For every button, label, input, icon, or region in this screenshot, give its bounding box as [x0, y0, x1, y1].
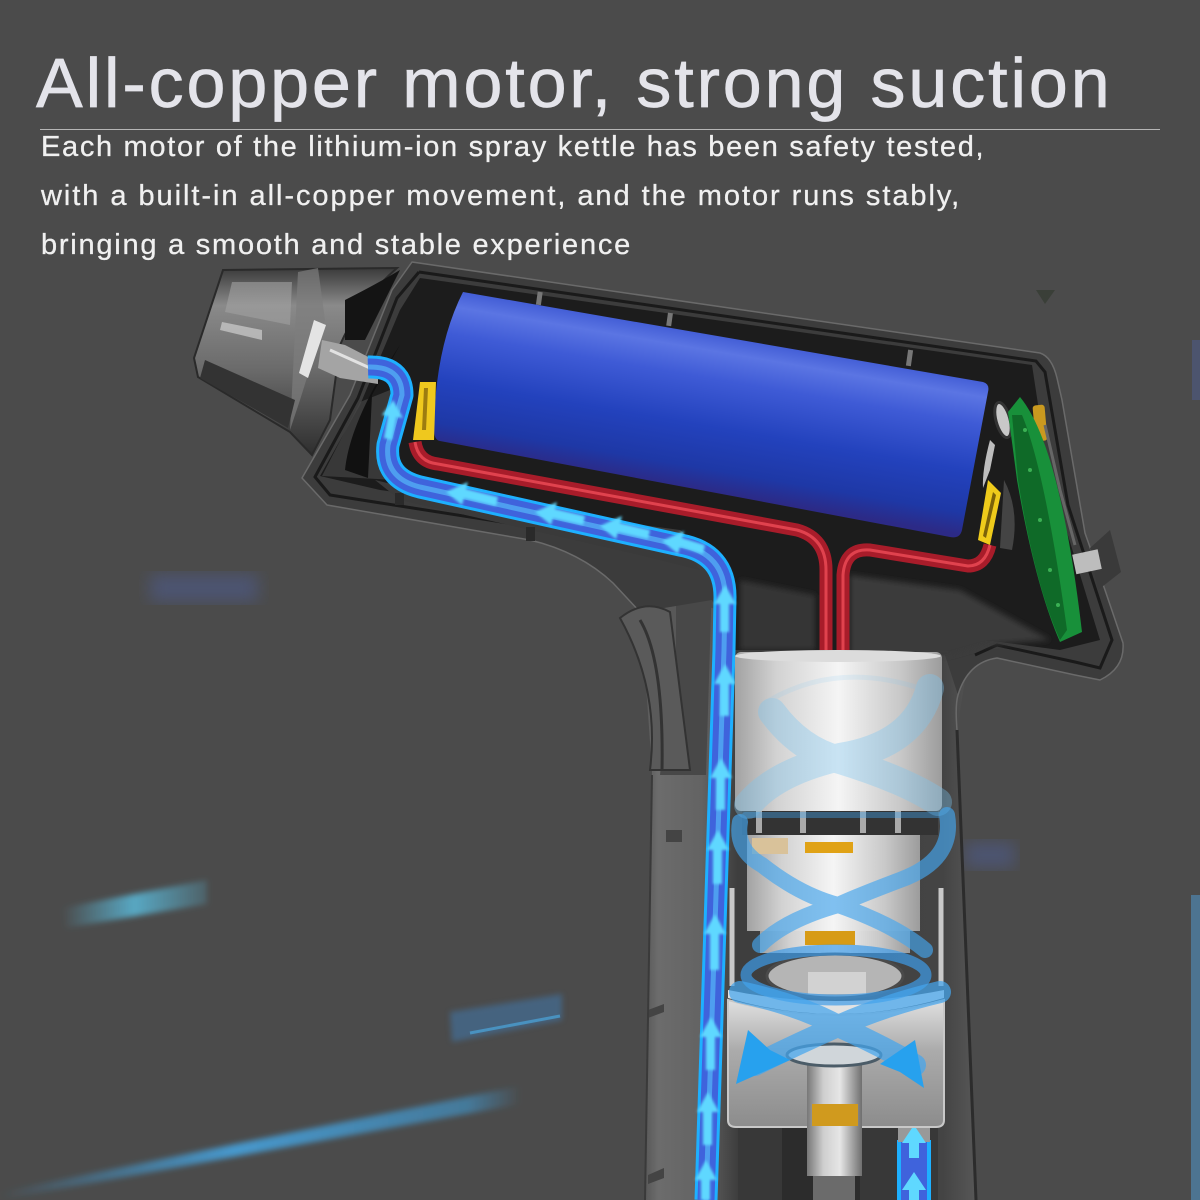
nozzle [194, 268, 400, 455]
background light streaks [0, 290, 1200, 1200]
lower water tube [897, 1120, 931, 1200]
title: All-copper motor, strong suction [36, 44, 1113, 122]
description text: Each motor of the lithium-ion spray kettle has been safety tested, [41, 131, 985, 163]
trigger [620, 606, 690, 770]
circuit board [1008, 397, 1082, 642]
side connector [1045, 425, 1121, 590]
flow arrows along tube [382, 400, 736, 1200]
gun handle [640, 575, 997, 1200]
battery terminals [413, 382, 1015, 550]
description text: with a built-in all-copper movement, and the motor runs stably, [41, 180, 961, 212]
motor [735, 650, 942, 998]
motor shaft [787, 1044, 881, 1200]
blue water tube [368, 367, 725, 1200]
red wires [415, 442, 990, 650]
title rule [40, 129, 1160, 130]
gun body shell [302, 262, 1123, 730]
description text [40, 131, 985, 261]
battery [434, 292, 988, 537]
description text: bringing a smooth and stable experience [41, 229, 632, 261]
swirl arrowheads [736, 1030, 924, 1088]
motor housing [728, 888, 944, 1127]
airflow swirl [739, 677, 948, 1065]
